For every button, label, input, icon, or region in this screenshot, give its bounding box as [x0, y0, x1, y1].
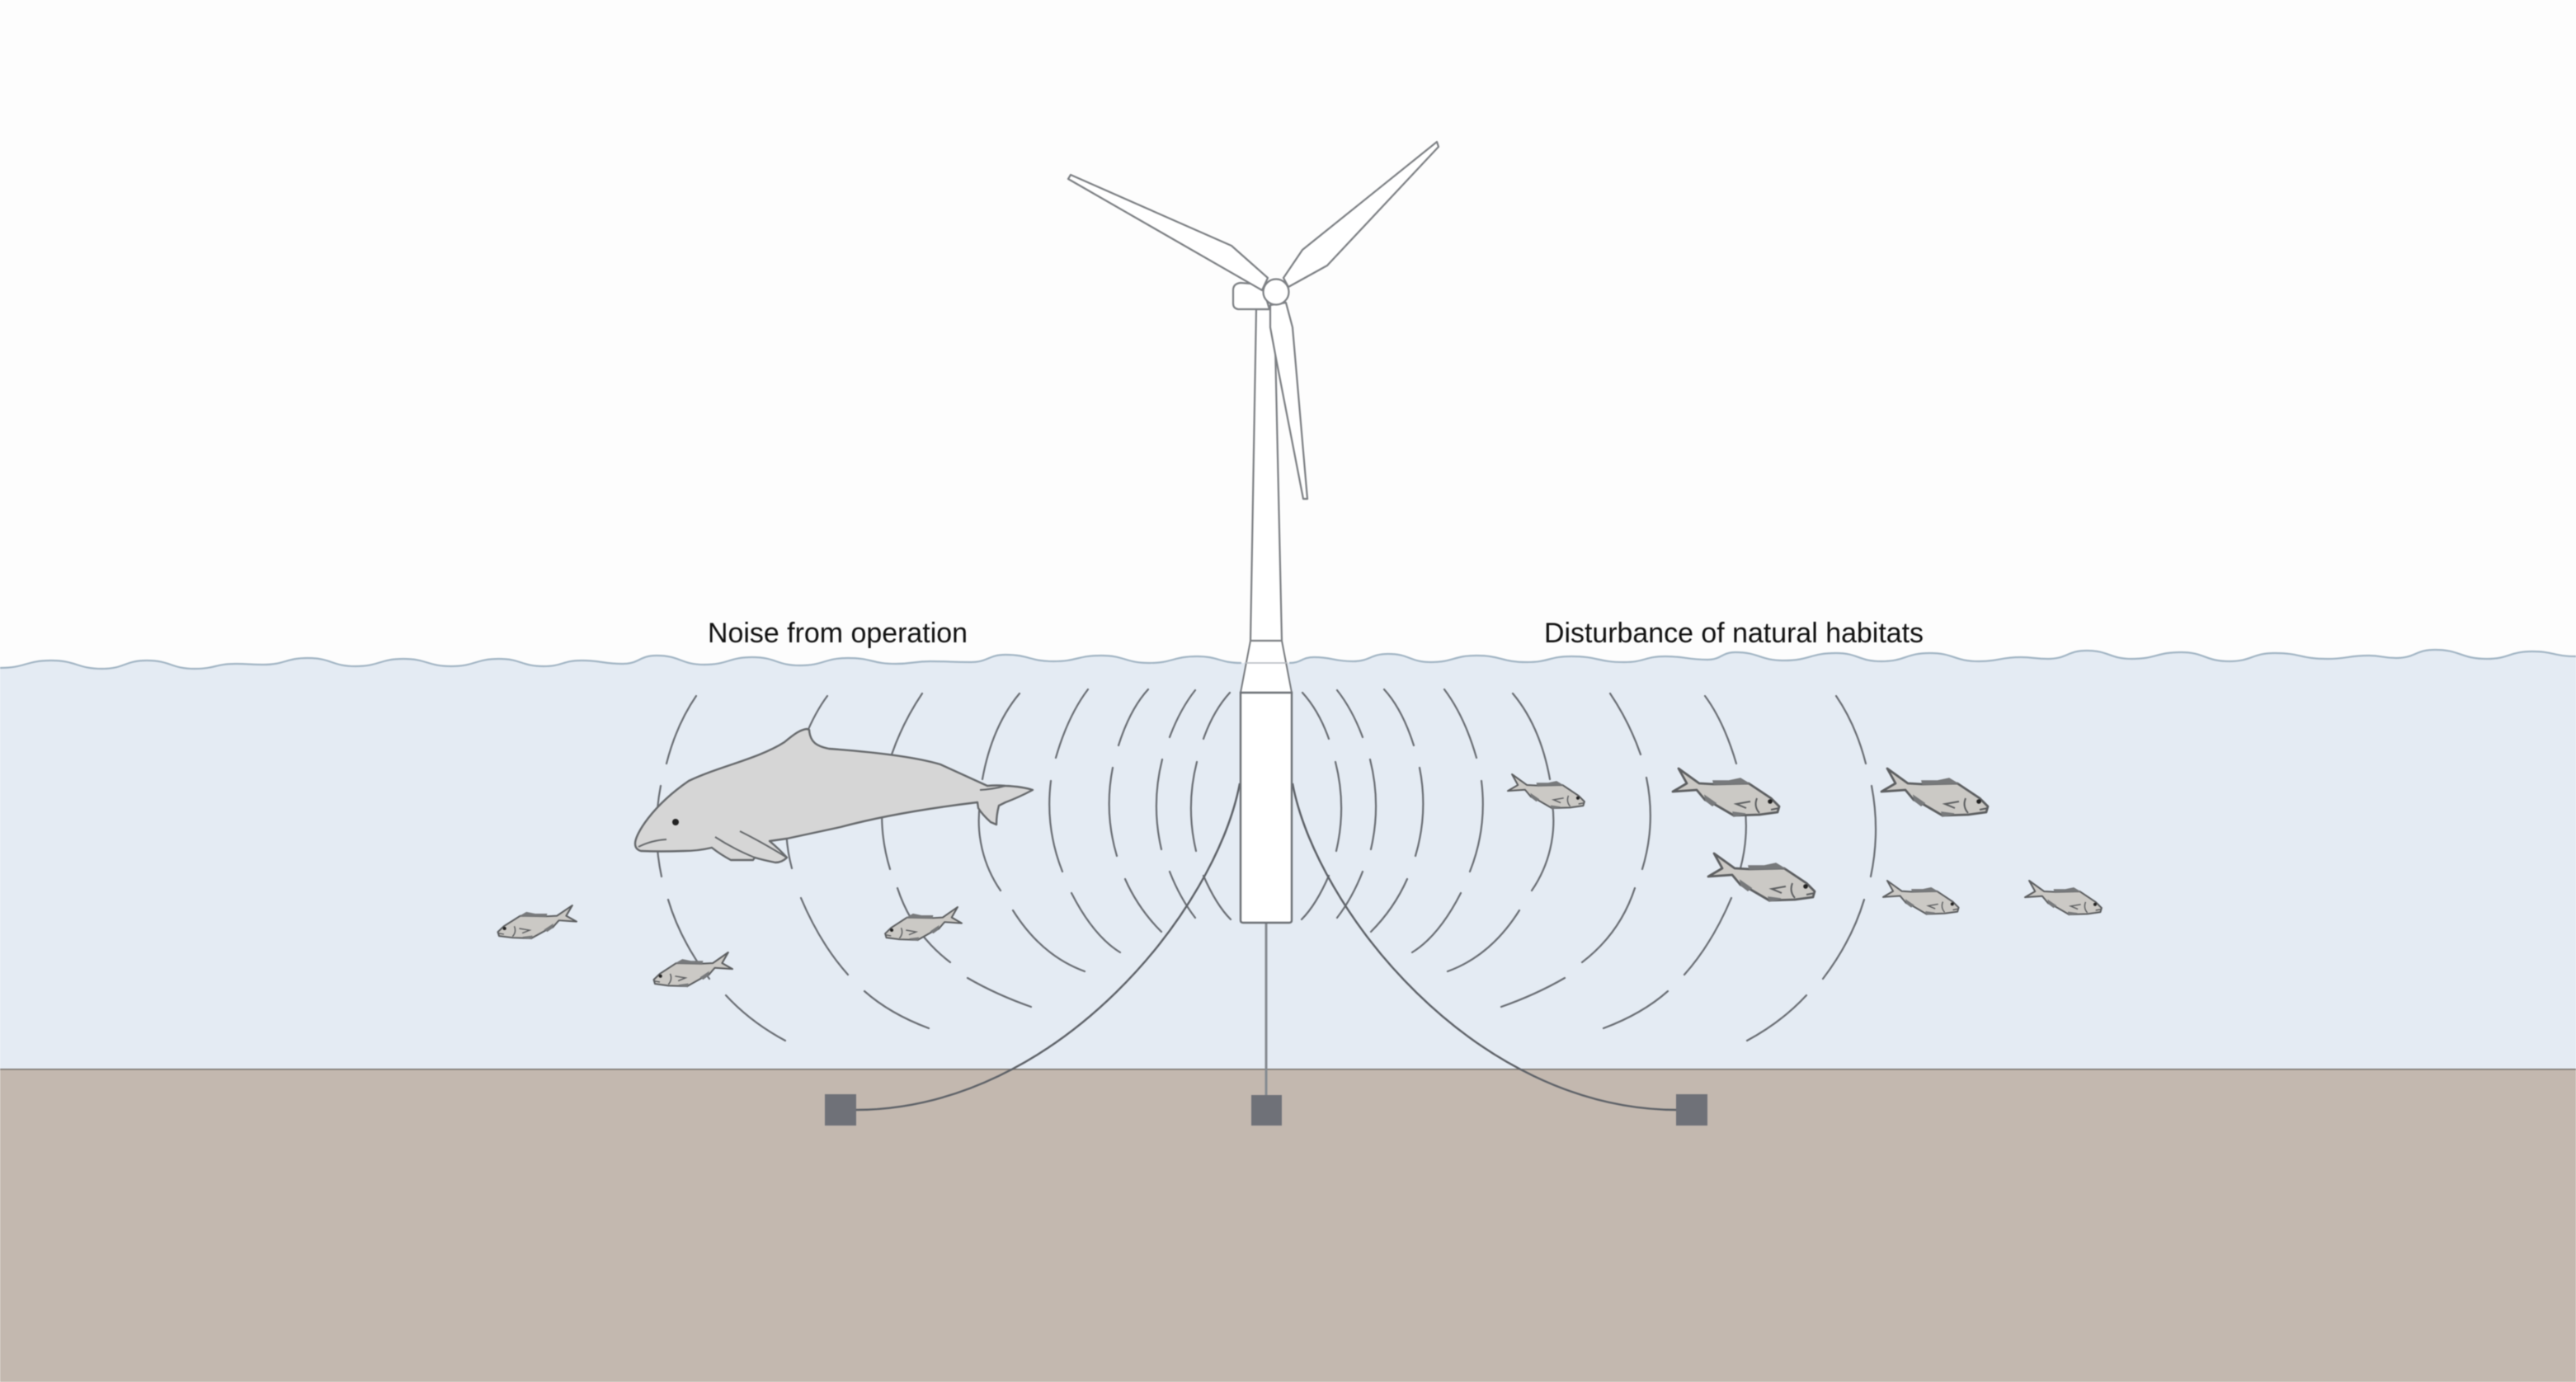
mooring cable: left [856, 783, 1240, 1110]
sky background [0, 0, 2576, 668]
seabed surface line [0, 1069, 2576, 1070]
blade: upper left [1068, 175, 1268, 290]
anchor: centre [1251, 1095, 1282, 1126]
noise waves: left side [657, 689, 1231, 1041]
fish 6 [2025, 881, 2102, 915]
label: disturbance of natural habitats: Disturbance of natural habitats [1544, 618, 1924, 649]
fish group: right [1508, 769, 2102, 915]
wind turbine [1068, 142, 1439, 641]
noise waves: right side [1302, 689, 1876, 1041]
fish group: left [498, 905, 962, 987]
hub [1264, 279, 1288, 305]
fish 2 [1673, 769, 1779, 816]
label: noise from operation: Noise from operation [708, 618, 968, 649]
fish 1 [1508, 774, 1585, 809]
tower [1250, 309, 1282, 641]
seabed [0, 1069, 2576, 1382]
blade: upper right [1283, 142, 1439, 287]
floating foundation [1241, 641, 1292, 923]
blade: lower [1270, 303, 1307, 499]
porpoise [635, 729, 1033, 863]
transition piece [1241, 641, 1292, 693]
mooring cable: right [1293, 783, 1676, 1110]
eye [672, 819, 679, 825]
fish 9 [885, 907, 962, 941]
sea water [0, 650, 2576, 1072]
fish 8 [654, 952, 732, 987]
anchor: left [825, 1094, 856, 1126]
nacelle [1233, 283, 1269, 309]
anchor: right [1676, 1094, 1707, 1126]
water line on transition piece [1245, 662, 1288, 664]
sea surface wave line [0, 650, 2576, 669]
fish 5 [1883, 881, 1959, 914]
mooring cable: centre [1265, 923, 1267, 1097]
fish 3 [1708, 853, 1815, 901]
fish 7 [498, 905, 577, 939]
fish 4 [1881, 769, 1988, 816]
buoyant spar [1241, 693, 1292, 923]
